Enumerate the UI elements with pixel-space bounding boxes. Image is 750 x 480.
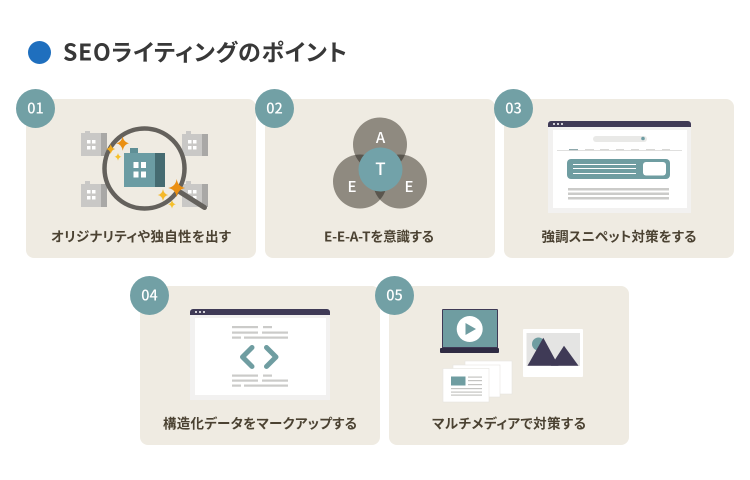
label: 04: 構造化データをマークアップする — [163, 412, 357, 432]
badge: 01: 01 — [27, 98, 44, 118]
panel: 01 original content — [16, 89, 256, 258]
diagram: E-E-A-T venn: A — [376, 127, 386, 148]
badge: 02: 02 — [266, 98, 283, 118]
badge: 05: 05 — [386, 284, 403, 306]
panel: 02 E-E-A-T — [255, 89, 495, 258]
badge: 01 — [16, 89, 55, 128]
diagram: E-E-A-T venn: E — [347, 176, 357, 197]
icon: code browser — [190, 309, 330, 400]
badge: 02 — [255, 89, 294, 128]
diagram: E-E-A-T venn: E — [404, 176, 414, 197]
label: 02: E-E-A-Tを意識する — [324, 226, 434, 246]
title: SEOライティングのポイント — [63, 34, 347, 68]
label: 03: 強調スニペット対策をする — [542, 226, 696, 246]
icon: photo — [523, 329, 583, 377]
icon: search results browser — [548, 121, 691, 213]
icon: document stack — [443, 361, 512, 402]
badge: 04 — [130, 276, 169, 315]
icon: magnifier over buildings — [81, 128, 208, 209]
diagram: E-E-A-T venn — [333, 118, 427, 208]
badge: 04: 04 — [141, 284, 158, 306]
panel: 03 featured snippet — [494, 89, 734, 258]
label: 05: マルチメディアで対策する — [432, 412, 586, 432]
badge: 03: 03 — [505, 98, 522, 118]
panel: 04 structured data — [130, 276, 380, 445]
panel: 05 multimedia — [375, 276, 629, 445]
badge: 05 — [375, 276, 414, 315]
badge: 03 — [494, 89, 533, 128]
diagram: E-E-A-T venn: T — [375, 155, 386, 180]
label: 01: オリジナリティや独自性を出す — [51, 226, 231, 246]
icon: laptop with video — [440, 309, 499, 353]
